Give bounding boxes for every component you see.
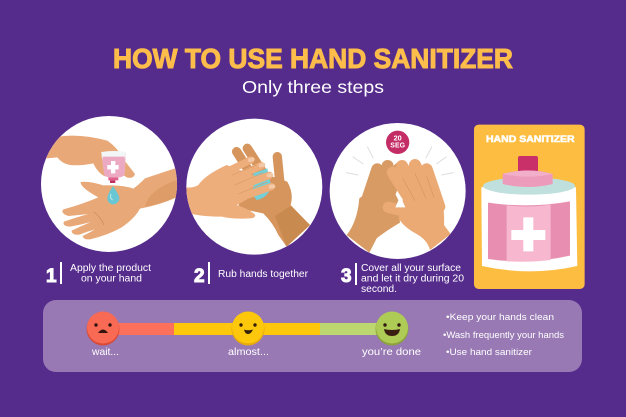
step 1 label: 1 [46, 266, 57, 287]
step 1 label: Apply the product [70, 263, 151, 274]
step 3 label: 3 [341, 266, 352, 287]
icon: yellow face [232, 312, 264, 346]
icon: right hand [388, 165, 451, 250]
title: HOW TO USE HAND SANITIZER [113, 43, 513, 74]
icon: timer badge: 20 [394, 134, 402, 143]
icon: lower hand [62, 167, 178, 239]
tips list [443, 312, 564, 358]
panel: step 2 illustration [185, 119, 322, 255]
step 3 label: Cover all your surface [361, 263, 461, 274]
step 2 label: 2 [194, 266, 205, 287]
panel: progress [43, 300, 582, 372]
icon: front hand [185, 159, 273, 219]
tips list: •Use hand sanitizer [446, 347, 532, 358]
icon: timer badge: SEG [390, 143, 405, 150]
step 2 label: Rub hands together [218, 269, 309, 280]
icon: sanitizer bottle large [481, 156, 577, 271]
face captions [91, 346, 421, 358]
face captions: you’re done [362, 346, 421, 358]
icon: shine lines [346, 147, 454, 175]
step 3 label: and let it dry during 20 [361, 274, 464, 284]
tips list: •Wash frequently your hands [443, 330, 564, 341]
panel: step 1 illustration [41, 116, 178, 252]
icon: green face [376, 312, 408, 346]
panel: product card [474, 125, 585, 289]
icon: red face [86, 312, 120, 346]
icon: back hand [237, 148, 310, 247]
step 2 label [194, 262, 309, 287]
icon: upper hand [43, 136, 135, 178]
subtitle: Only three steps [242, 77, 384, 97]
step 1 label [46, 262, 151, 287]
step 3 label [341, 263, 464, 295]
icon: left hand [347, 166, 400, 253]
step 1 label: on your hand [81, 274, 142, 284]
step 3 label: second. [361, 284, 397, 295]
icon: timer badge [386, 131, 409, 154]
face captions: almost... [228, 346, 269, 358]
icon: sanitizer bottle [101, 151, 126, 183]
icon: gel [253, 168, 271, 200]
card heading: HAND SANITIZER [486, 134, 575, 144]
tips list: •Keep your hands clean [446, 312, 554, 323]
icon: drop [107, 186, 119, 204]
face captions: wait... [91, 346, 119, 358]
panel: step 3 illustration [330, 123, 466, 259]
progress bar [118, 323, 380, 335]
